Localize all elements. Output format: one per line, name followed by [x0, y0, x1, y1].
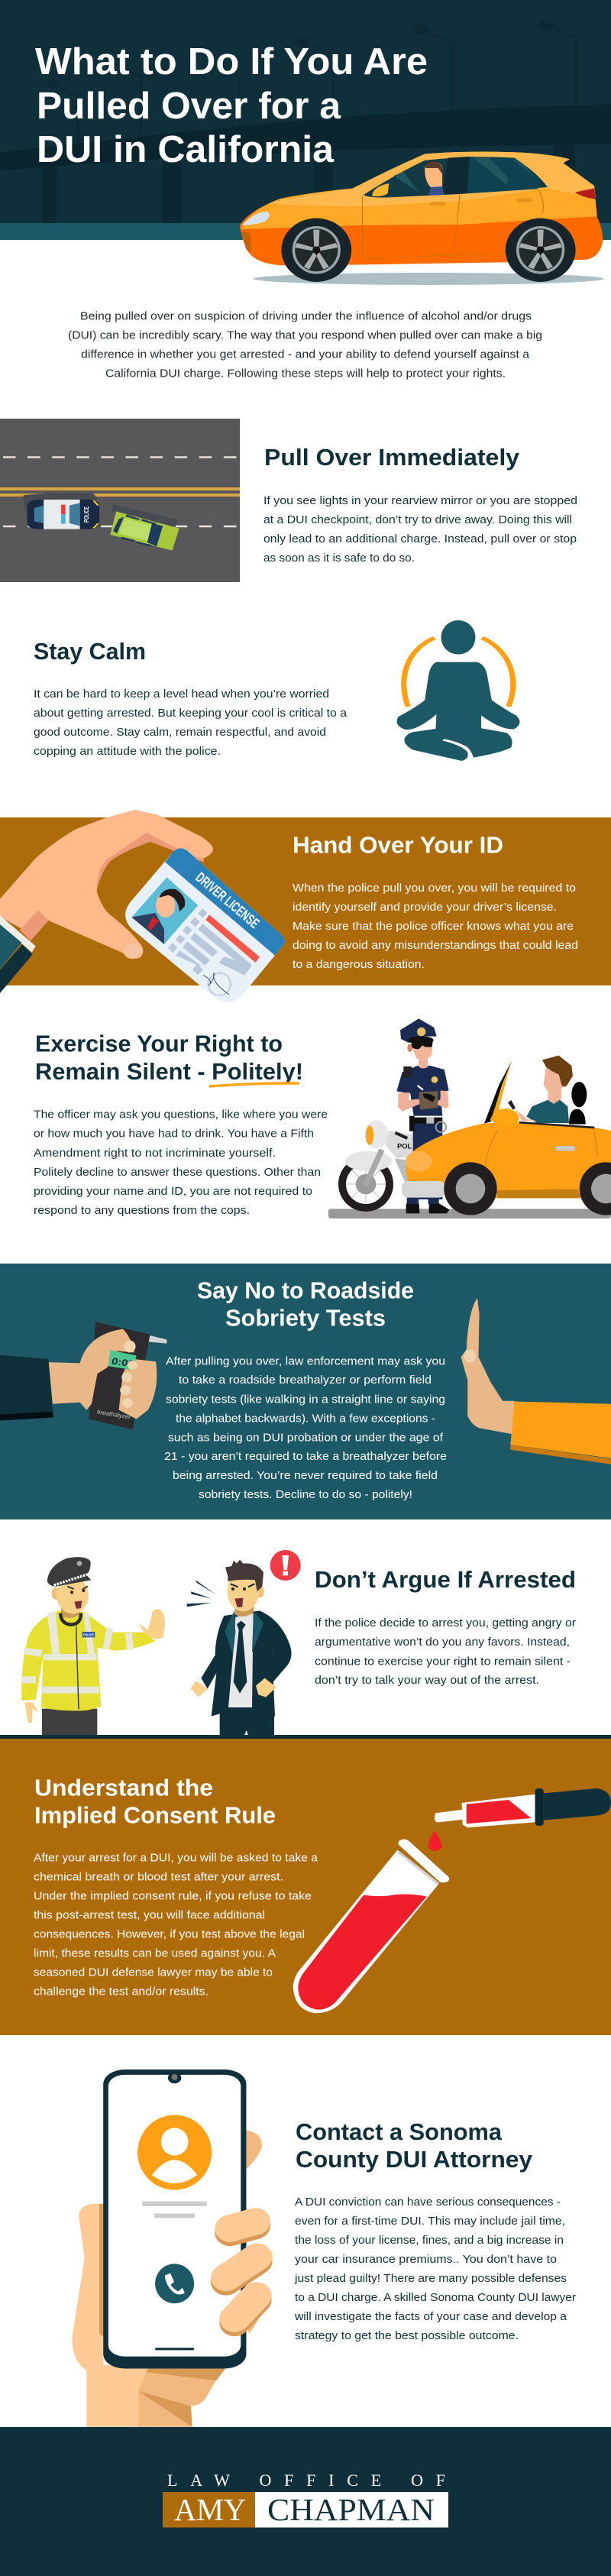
body text: identify yourself and provide your driver’s license. — [293, 901, 557, 914]
body text: don’t try to talk your way out of the arrest. — [315, 1674, 539, 1687]
body text: about getting arrested. But keeping your cool is critical to a — [34, 707, 348, 720]
body text: When the police pull you over, you will be required to — [293, 882, 576, 895]
body text — [263, 494, 577, 565]
illustration: hand holding breathalyzer — [0, 1322, 166, 1429]
intro text: Being pulled over on suspicion of driving under the influence of alcohol and/or drugs — [80, 310, 532, 322]
heading — [296, 2118, 533, 2173]
heading: Hand Over Your ID — [293, 831, 503, 859]
heading: Pull Over Immediately — [264, 444, 520, 471]
intro text — [68, 310, 542, 380]
body text: Politely decline to answer these questions. Other than — [34, 1166, 321, 1179]
body text — [34, 1108, 328, 1217]
body text: to take a roadside breathalyzer or perform field — [179, 1374, 432, 1387]
body text: After pulling you over, law enforcement may ask you — [166, 1354, 445, 1367]
body text: being arrested. You’re never required to take field — [173, 1469, 438, 1482]
body text: sobriety tests (like walking in a straight line or saying — [166, 1393, 445, 1406]
body text: chemical breath or blood test after your arrest. — [34, 1871, 283, 1884]
illustration: police officer, motorcycle and driver in car — [328, 1018, 611, 1218]
body text: good outcome. Stay calm, remain respectful, and avoid — [34, 726, 326, 739]
body text: even for a first-time DUI. This may include jail time, — [295, 2215, 565, 2228]
heading: Remain Silent - Politely! — [35, 1058, 303, 1085]
heading: County DUI Attorney — [296, 2146, 533, 2173]
illustration: officer with raised hand: POLICE — [83, 1633, 94, 1637]
illustration: blood test tube and dropper — [293, 1788, 611, 2013]
icon: meditating person — [397, 620, 520, 761]
illustration: hand holding breathalyzer: breathalyzer — [96, 1409, 132, 1421]
illustration: stop hand with orange sleeve — [461, 1298, 611, 1464]
body text: to a DUI charge. A skilled Sonoma County DUI lawyer — [295, 2291, 576, 2304]
body text — [34, 1852, 318, 1998]
illustration: shouting man in suit — [186, 1550, 301, 1736]
body text: seasoned DUI defense lawyer may be able to — [34, 1966, 273, 1979]
body text: Make sure that the police officer knows what you are — [293, 920, 574, 933]
body text: will investigate the facts of your case and develop a — [294, 2310, 567, 2323]
body text: sobriety tests. Decline to do so - politely! — [199, 1488, 412, 1501]
logo: law office of Amy Chapman: LAW OFFICE OF — [167, 2471, 445, 2490]
body text: at a DUI checkpoint, don’t try to drive away. Doing this will — [263, 513, 572, 526]
body text: as soon as it is safe to do so. — [263, 552, 415, 565]
heading: Say No to Roadside — [197, 1277, 414, 1303]
body text — [293, 882, 578, 971]
panel: footer — [0, 2427, 611, 2576]
illustration: officer with raised hand — [21, 1557, 165, 1736]
body text: If you see lights in your rearview mirror or you are stopped — [263, 494, 577, 507]
body text — [294, 2196, 576, 2342]
panel: understand the implied consent rule — [0, 1735, 611, 2035]
body text: the loss of your license, fines, and a big increase in — [295, 2234, 564, 2247]
body text: consequences. However, if you test above the legal — [34, 1928, 305, 1941]
intro text: difference in whether you get arrested - and your ability to defend yourself against a — [81, 348, 530, 361]
panel: stay calm — [34, 620, 520, 761]
body text: It can be hard to keep a level head when you’re worried — [34, 688, 329, 701]
underline brush stroke — [209, 1083, 299, 1086]
body text: respond to any questions from the cops. — [34, 1204, 250, 1217]
body text: just plead guilty! There are many possible defenses — [294, 2272, 567, 2285]
heading — [35, 1030, 303, 1085]
background: highway and street lamps — [0, 21, 611, 223]
heading: Understand the — [34, 1775, 213, 1801]
title: What to Do If You Are — [35, 41, 428, 83]
logo: law office of Amy Chapman — [163, 2471, 448, 2527]
heading: Exercise Your Right to — [35, 1030, 283, 1057]
panel: hand over your ID — [0, 810, 611, 1002]
body text: the alphabet backwards). With a few exceptions - — [176, 1412, 435, 1425]
body text: providing your name and ID, you are not required to — [34, 1185, 312, 1198]
body text: The officer may ask you questions, like where you were — [34, 1108, 328, 1121]
body text: such as being on DUI probation or under the age of — [168, 1431, 444, 1444]
panel: say no to roadside sobriety tests — [0, 1264, 611, 1519]
title: Pulled Over for a — [37, 86, 341, 127]
body text: A DUI conviction can have serious consequences - — [295, 2196, 561, 2209]
body text: After your arrest for a DUI, you will be asked to take a — [34, 1852, 318, 1865]
body text: doing to avoid any misunderstandings that could lead — [293, 939, 578, 952]
body text — [315, 1616, 576, 1687]
logo: law office of Amy Chapman: CHAPMAN — [267, 2492, 435, 2527]
illustration: road with police car and green car — [0, 419, 240, 582]
body text: Under the implied consent rule, if you refuse to take — [34, 1890, 312, 1903]
body text: argumentative won’t do you any favors. Instead, — [315, 1636, 570, 1649]
panel: pull over immediately — [0, 419, 577, 582]
body text: continue to exercise your right to remain silent - — [315, 1655, 571, 1668]
heading: Stay Calm — [34, 638, 146, 665]
body text: limit, these results can be used against you. A — [34, 1947, 276, 1960]
panel: header — [0, 0, 611, 285]
body text: If the police decide to arrest you, getting angry or — [315, 1616, 576, 1629]
heading — [34, 1775, 276, 1829]
heading: Contact a Sonoma — [296, 2118, 503, 2145]
intro text: California DUI charge. Following these steps will help to protect your rights. — [105, 367, 506, 380]
heading: Sobriety Tests — [225, 1304, 386, 1331]
heading — [197, 1277, 414, 1331]
body text: or how much you have had to drink. You have a Fifth — [34, 1128, 314, 1141]
body text: challenge the test and/or results. — [34, 1985, 209, 1998]
heading: Implied Consent Rule — [34, 1802, 276, 1829]
body text: copping an attitude with the police. — [34, 745, 221, 758]
body text: to a dangerous situation. — [293, 958, 425, 971]
panel: contact a sonoma county DUI attorney — [72, 2070, 576, 2427]
intro text: (DUI) can be incredibly scary. The way that you respond when pulled over can make a big — [68, 328, 542, 342]
panel: don't argue if arrested — [21, 1550, 576, 1736]
body text — [164, 1354, 447, 1501]
body text: strategy to get the best possible outcome. — [295, 2329, 519, 2342]
illustration: hand holding driver license: DRIVER LICENSE — [192, 869, 263, 931]
title — [35, 41, 428, 170]
panel: exercise your right to remain silent — [34, 1018, 611, 1218]
illustration: hand holding driver license — [0, 810, 285, 1002]
illustration: road with police car and green car: POLICE — [83, 506, 90, 523]
heading: Don’t Argue If Arrested — [315, 1566, 576, 1593]
logo: law office of Amy Chapman: AMY — [174, 2492, 246, 2527]
icon: orange car — [240, 152, 604, 285]
body text: only lead to an additional charge. Instead, pull over or stop — [263, 532, 577, 545]
body text: this post-arrest test, you will face additional — [34, 1909, 265, 1922]
body text — [34, 688, 348, 758]
title: DUI in California — [37, 129, 335, 170]
body text: your car insurance premiums.. You don’t have to — [295, 2253, 557, 2266]
illustration: hand holding phone — [72, 2070, 269, 2427]
body text: 21 - you aren’t required to take a breathalyzer before — [164, 1450, 447, 1463]
illustration: hand holding breathalyzer: 0:00 — [111, 1356, 135, 1370]
illustration: police officer, motorcycle and driver in car: POL — [397, 1143, 412, 1150]
body text: Amendment right to not incriminate yourself. — [34, 1147, 276, 1160]
